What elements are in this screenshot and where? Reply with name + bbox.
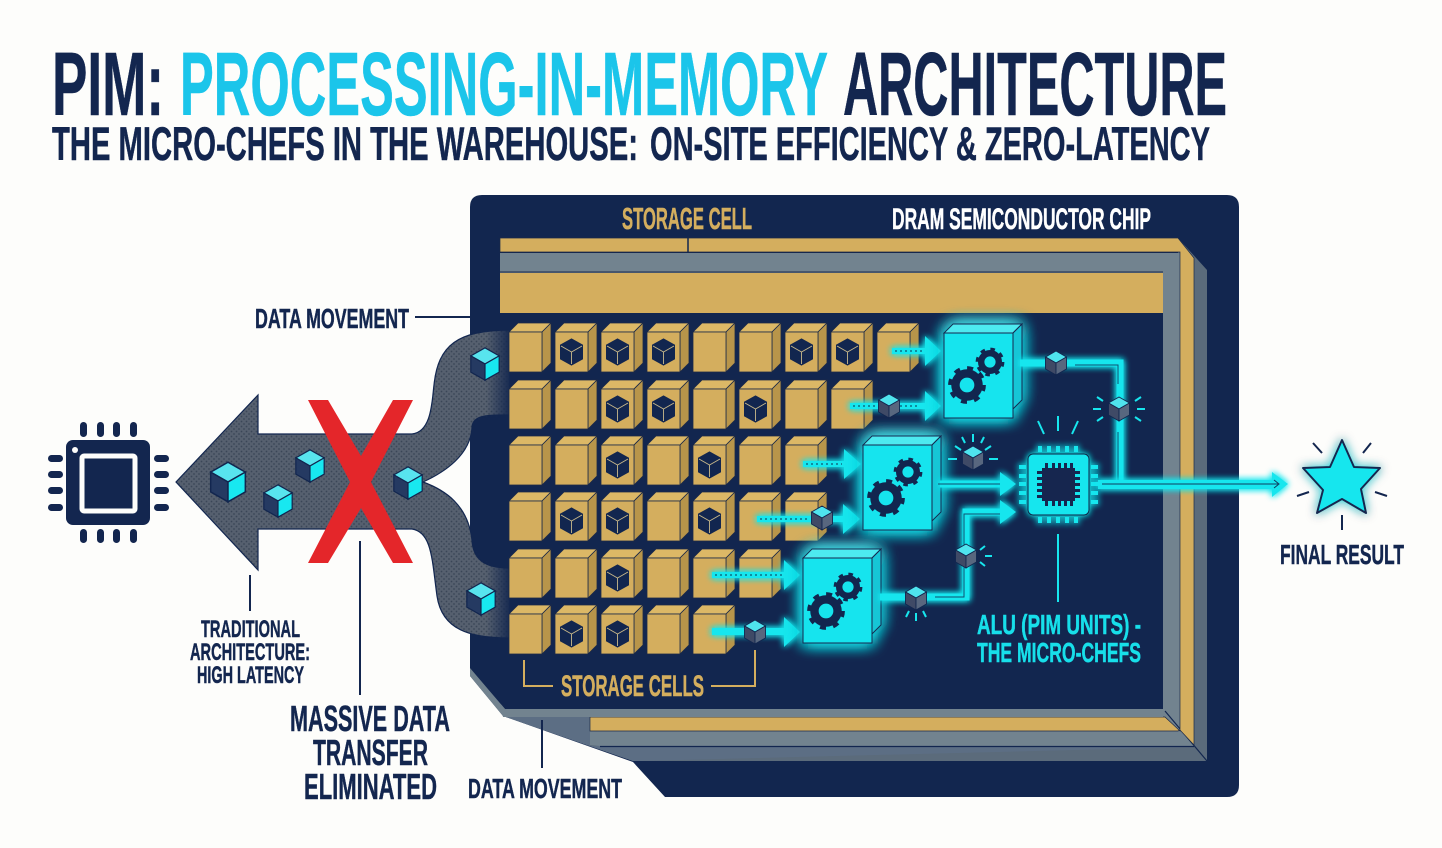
output connectors [880, 363, 1120, 597]
label: traditional architecture [190, 575, 310, 689]
data cube: lower [264, 485, 292, 517]
label: data movement bottom: DATA MOVEMENT [468, 773, 622, 804]
label: traditional architecture: HIGH LATENCY [197, 662, 304, 689]
label: massive data transfer eliminated: MASSIVE DATA [290, 698, 450, 739]
icon: red X [308, 400, 413, 563]
row 3 [509, 436, 827, 485]
label: traditional architecture: TRADITIONAL [201, 616, 300, 643]
row 4 [509, 492, 827, 541]
row 5 [509, 549, 781, 598]
label: traditional architecture: ARCHITECTURE: [190, 639, 310, 666]
flow cubes [744, 351, 1130, 644]
subtitle: THE MICRO-CHEFS IN THE WAREHOUSE: [52, 117, 638, 170]
input arrows into PIM units [712, 336, 941, 647]
data flow ribbon: traditional architecture arrow [176, 330, 510, 638]
panel: DRAM semiconductor chip [470, 195, 1239, 797]
icon: CPU chip [48, 422, 169, 543]
label: storage cells: STORAGE CELLS [561, 670, 704, 703]
label: massive data transfer eliminated: ELIMINATED [304, 766, 437, 807]
storage cells bracket [524, 650, 755, 686]
leader: ALU [1057, 534, 1059, 602]
label: massive data transfer eliminated: TRANSFER [313, 732, 428, 773]
PIM unit 3 [803, 549, 881, 643]
ALU chip [1019, 446, 1098, 523]
label: storage cell: STORAGE CELL [622, 201, 752, 236]
PIM unit 1 [944, 324, 1022, 418]
storage cell grid [509, 323, 919, 654]
data cube: large [211, 462, 245, 502]
title: PIM: [52, 35, 164, 135]
arrow: to final result [1098, 472, 1288, 497]
label: DRAM semiconductor chip: DRAM SEMICONDUCTOR CHIP [892, 203, 1151, 236]
PIM unit 2 [863, 436, 941, 530]
label: ALU PIM units [977, 609, 1141, 668]
icon: final result star [1297, 440, 1387, 530]
label: data movement top: DATA MOVEMENT [255, 303, 409, 334]
row 1 [509, 323, 919, 372]
label: ALU PIM units: ALU (PIM UNITS) - [977, 609, 1141, 640]
row 6 [509, 605, 735, 654]
data cubes on ribbon [394, 348, 499, 615]
spark rays [906, 397, 1145, 621]
label: ALU PIM units: THE MICRO-CHEFS [977, 637, 1141, 668]
data cube: upper [296, 450, 324, 482]
row 2 [509, 380, 873, 429]
title: PROCESSING-IN-MEMORY [180, 35, 828, 135]
label: massive data transfer eliminated [290, 541, 450, 807]
